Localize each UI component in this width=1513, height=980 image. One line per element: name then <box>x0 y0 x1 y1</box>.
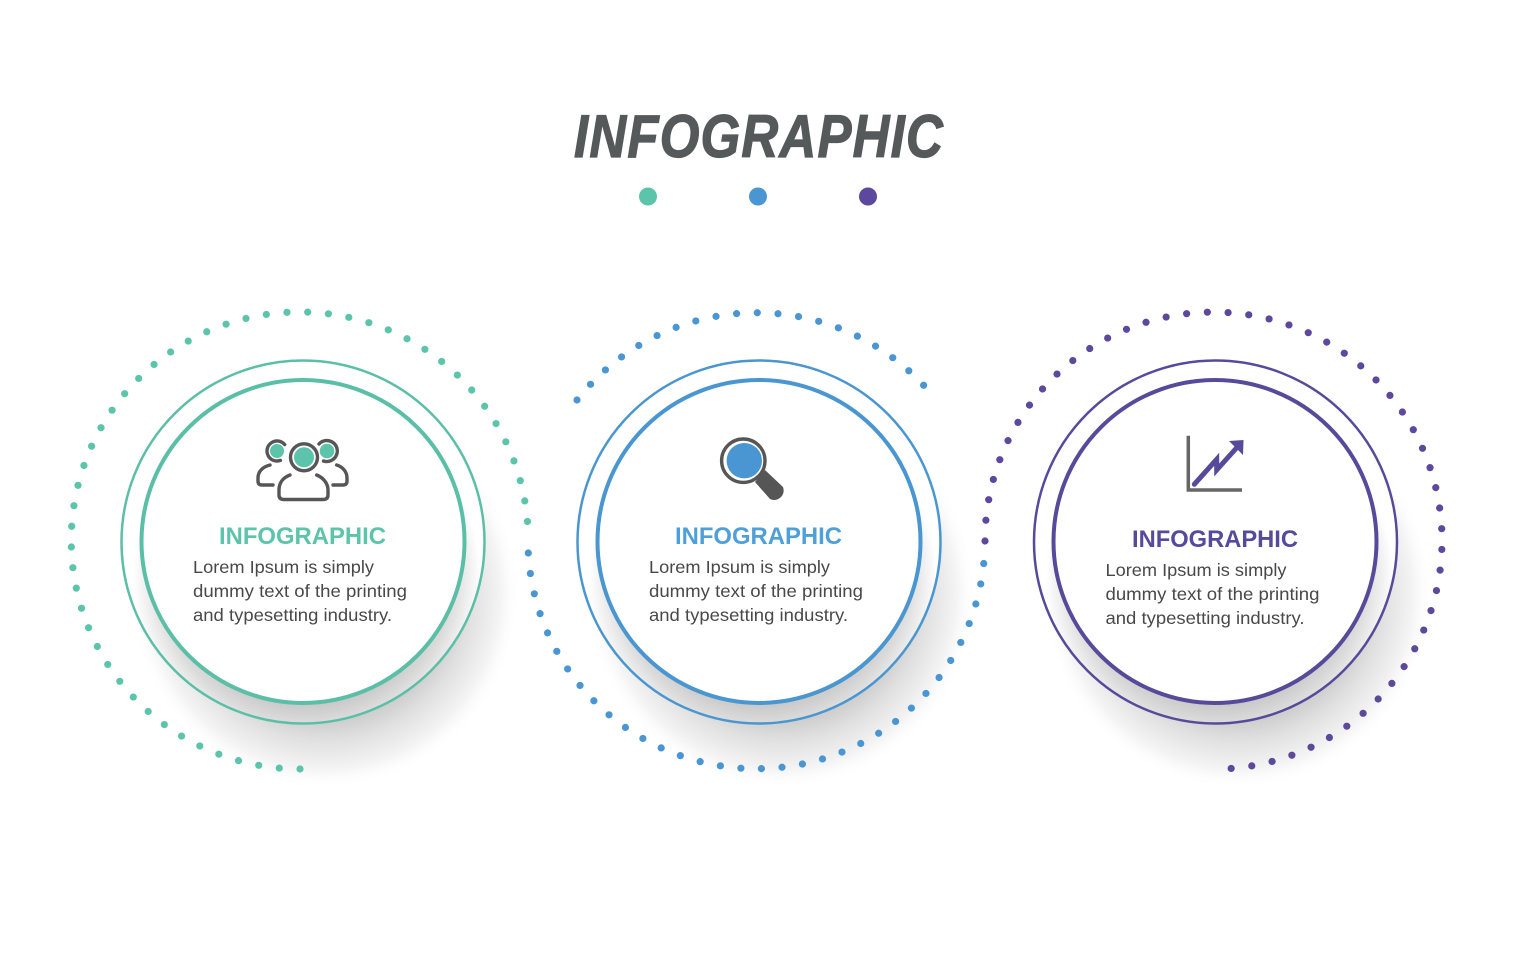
title: INFOGRAPHIC <box>574 103 944 170</box>
heading: purple card: INFOGRAPHIC <box>1132 526 1298 553</box>
dotted arc: green <box>71 312 527 769</box>
dotted arc: blue lower <box>528 553 984 769</box>
outer ring: blue <box>578 360 940 724</box>
outer ring: purple <box>1034 360 1397 724</box>
inner ring: green <box>142 380 464 703</box>
title colour dots <box>639 188 877 206</box>
body text: blue card: dummy text of the printing <box>649 581 863 601</box>
icon: growth chart <box>1188 436 1244 490</box>
body text: blue card: and typesetting industry. <box>649 605 848 625</box>
body text: blue card: Lorem Ipsum is simply <box>649 557 830 577</box>
dotted arc: purple <box>985 312 1442 768</box>
body text: green card: dummy text of the printing <box>193 581 407 601</box>
inner ring: blue <box>598 380 920 703</box>
outer ring: green <box>122 360 484 724</box>
heading: blue card: INFOGRAPHIC <box>675 523 842 550</box>
body text: purple card: and typesetting industry. <box>1106 608 1304 628</box>
shadow: purple card <box>1042 399 1432 789</box>
body text: purple card <box>1106 560 1320 628</box>
heading: green card: INFOGRAPHIC <box>219 523 386 550</box>
body text: blue card <box>649 557 863 625</box>
dotted arc: blue upper <box>577 313 924 400</box>
icon: magnifying glass <box>722 439 784 500</box>
body text: green card: and typesetting industry. <box>193 605 392 625</box>
panel: purple circle card <box>1034 360 1432 789</box>
icon: people <box>258 441 347 500</box>
shadow: green card <box>130 399 520 789</box>
shadow: blue card <box>586 399 976 789</box>
body text: green card <box>193 557 407 625</box>
panel: blue circle card <box>578 360 976 789</box>
panel: green circle card <box>122 360 520 789</box>
body text: purple card: dummy text of the printing <box>1106 584 1320 604</box>
body text: green card: Lorem Ipsum is simply <box>193 557 374 577</box>
inner ring: purple <box>1054 380 1376 703</box>
body text: purple card: Lorem Ipsum is simply <box>1106 560 1287 580</box>
